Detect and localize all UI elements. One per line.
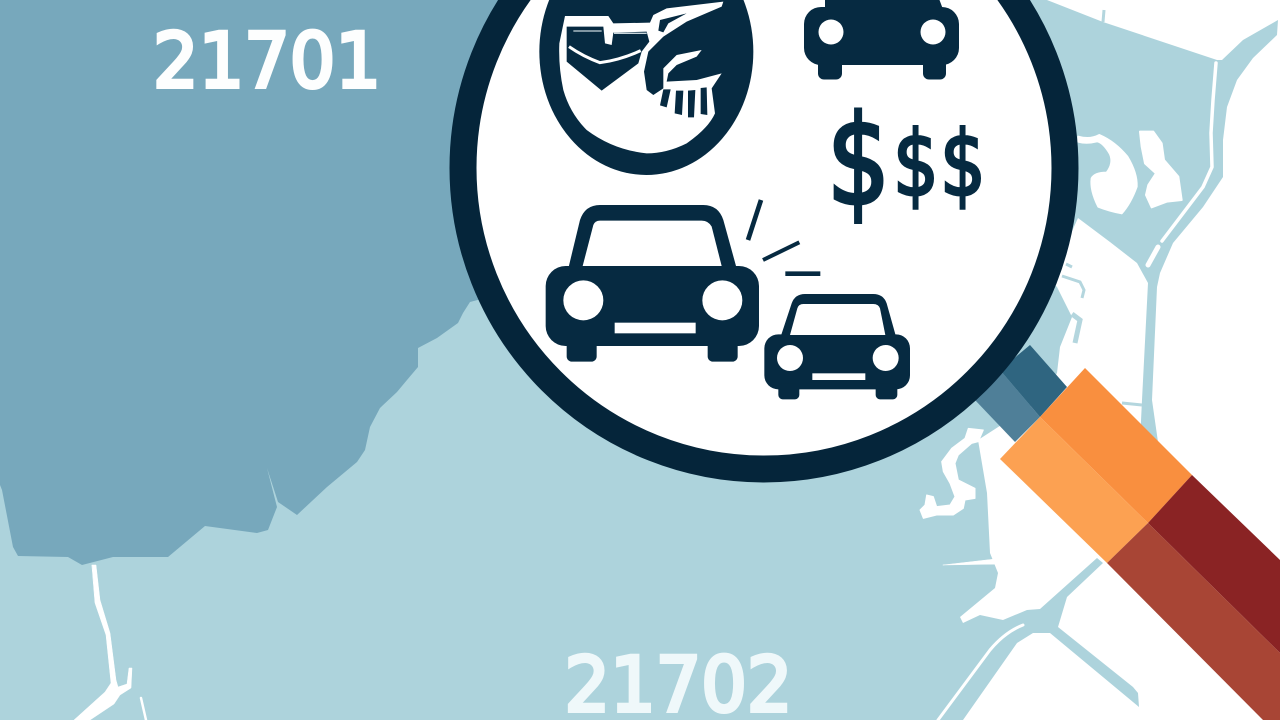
icon: dollar signs: $ [940, 112, 986, 217]
icon: dollar signs: $ [827, 90, 890, 234]
handle neck [975, 345, 1067, 442]
label: ZIP code 21701: 21701 [153, 16, 381, 105]
small car [764, 294, 910, 399]
icon: dollar signs [827, 90, 986, 234]
handle grip: orange collar [1000, 368, 1192, 563]
magnifying glass handle [975, 345, 1280, 720]
lake islands [1078, 132, 1182, 213]
map: dark ZIP region 21701 [0, 0, 600, 565]
icon: two cars colliding [546, 200, 910, 399]
icon: dollar signs: $ [893, 112, 939, 217]
icon: hand and wallet emblem [539, 0, 753, 175]
magnifying glass lens [463, 0, 1065, 469]
river wiggle [920, 428, 983, 518]
handle grip: red shaft [1107, 475, 1280, 720]
impact lines [748, 200, 820, 274]
icon: car at top [804, 0, 959, 80]
large car [546, 205, 759, 362]
